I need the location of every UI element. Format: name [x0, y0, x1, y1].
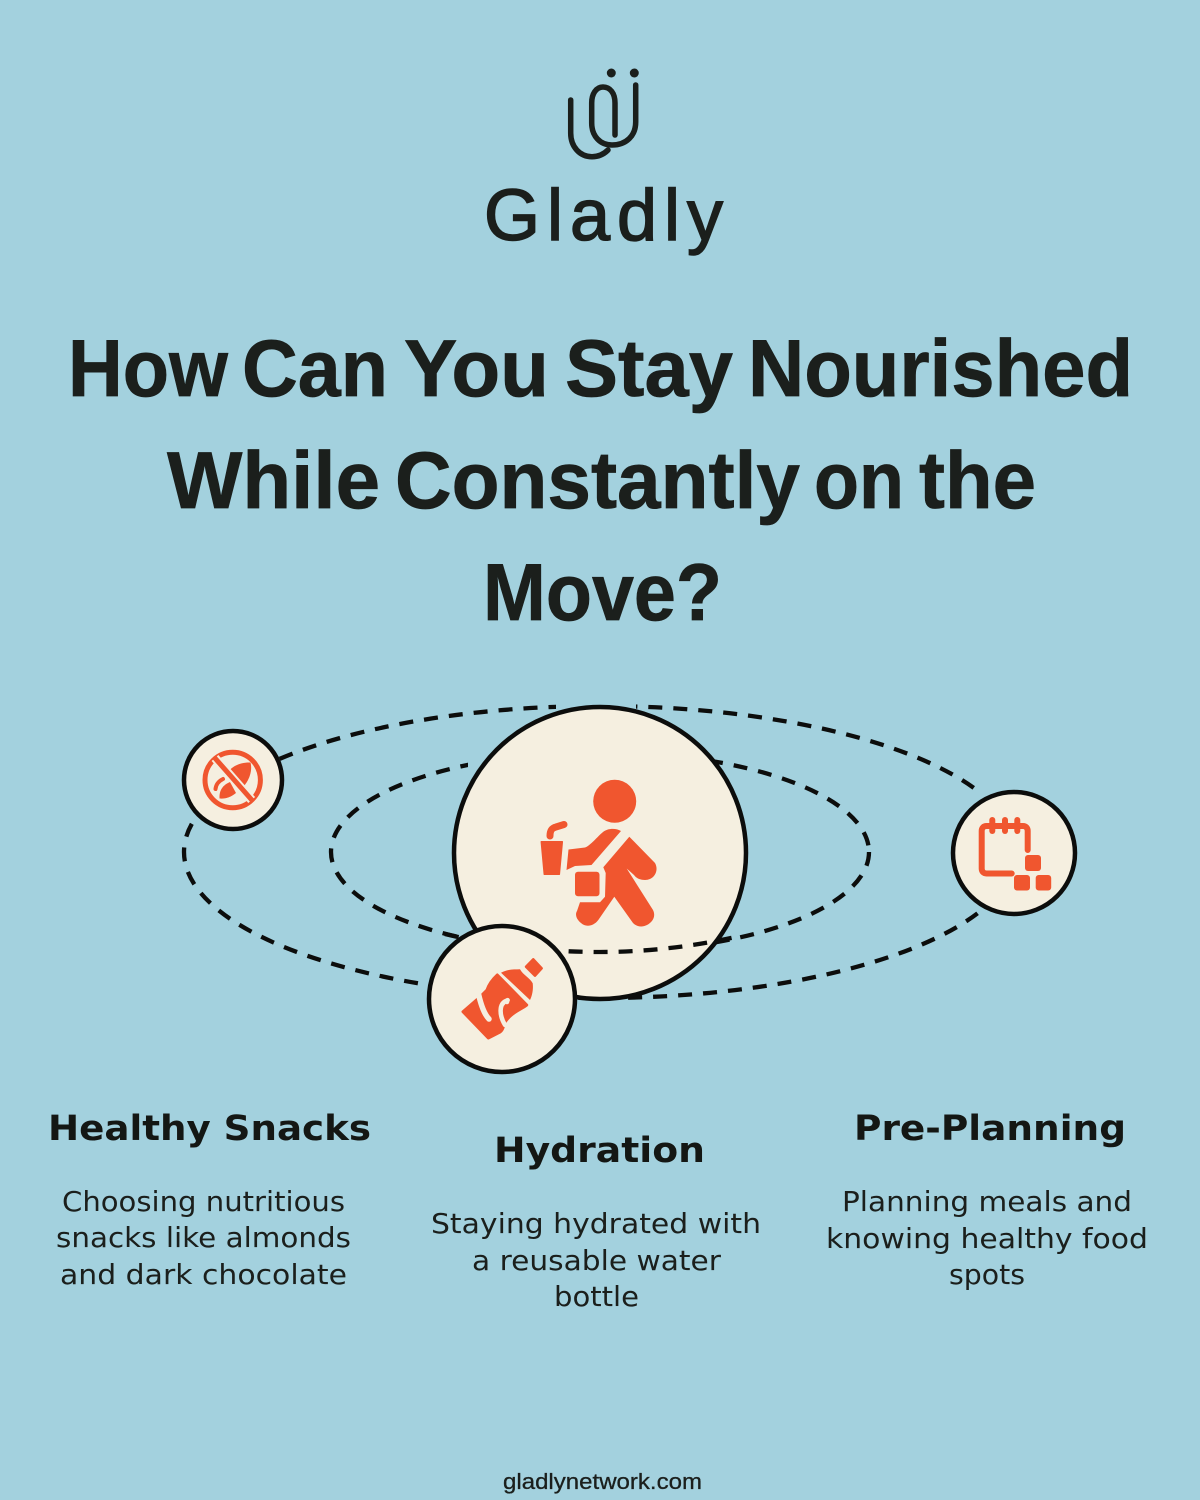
- title: Nourished: [748, 324, 1133, 414]
- logo wordmark: Gladly: [484, 176, 723, 256]
- description: bottle: [554, 1280, 639, 1313]
- title: [68, 324, 1133, 638]
- title: How: [68, 324, 229, 414]
- description: knowing healthy food: [826, 1222, 1148, 1255]
- description: Choosing nutritious: [62, 1185, 345, 1218]
- footer url: gladlynetwork.com: [503, 1469, 702, 1494]
- icon: walking person with drink and bag: [541, 780, 657, 926]
- heading: Healthy Snacks: [48, 1109, 371, 1149]
- description: and dark chocolate: [60, 1258, 347, 1291]
- inner orbit: [331, 752, 869, 952]
- outer orbit: [184, 706, 1016, 998]
- inner orbit front arc: [445, 934, 740, 952]
- central circle: [454, 707, 746, 999]
- title: Stay: [565, 324, 733, 414]
- description: snacks like almonds: [56, 1221, 351, 1254]
- description: [826, 1185, 1148, 1291]
- node: hydration: [429, 926, 575, 1072]
- description: [56, 1185, 351, 1291]
- title: Constantly: [395, 436, 800, 526]
- icon: water bottle: [463, 959, 542, 1038]
- title: Move?: [483, 548, 722, 638]
- description: a reusable water: [472, 1244, 722, 1277]
- description: Planning meals and: [842, 1185, 1132, 1218]
- column: hydration: [431, 1131, 761, 1313]
- icon: calendar with blocks: [982, 817, 1051, 890]
- title: You: [404, 324, 549, 414]
- title: on: [814, 436, 904, 526]
- column: healthy snacks: [48, 1109, 371, 1291]
- node: pre-planning: [953, 792, 1075, 914]
- logo: [484, 68, 723, 256]
- heading: Hydration: [494, 1131, 705, 1171]
- title: Can: [242, 324, 388, 414]
- heading: Pre-Planning: [854, 1109, 1126, 1149]
- title: While: [167, 436, 380, 526]
- icon: no nuts: [205, 752, 260, 808]
- description: Staying hydrated with: [431, 1207, 761, 1240]
- title: the: [919, 436, 1036, 526]
- orbit diagram: [184, 701, 1075, 1072]
- description: spots: [949, 1258, 1025, 1291]
- column: pre-planning: [826, 1109, 1148, 1291]
- node: healthy snacks: [184, 731, 282, 829]
- logo mark: [571, 68, 639, 157]
- description: [431, 1207, 761, 1313]
